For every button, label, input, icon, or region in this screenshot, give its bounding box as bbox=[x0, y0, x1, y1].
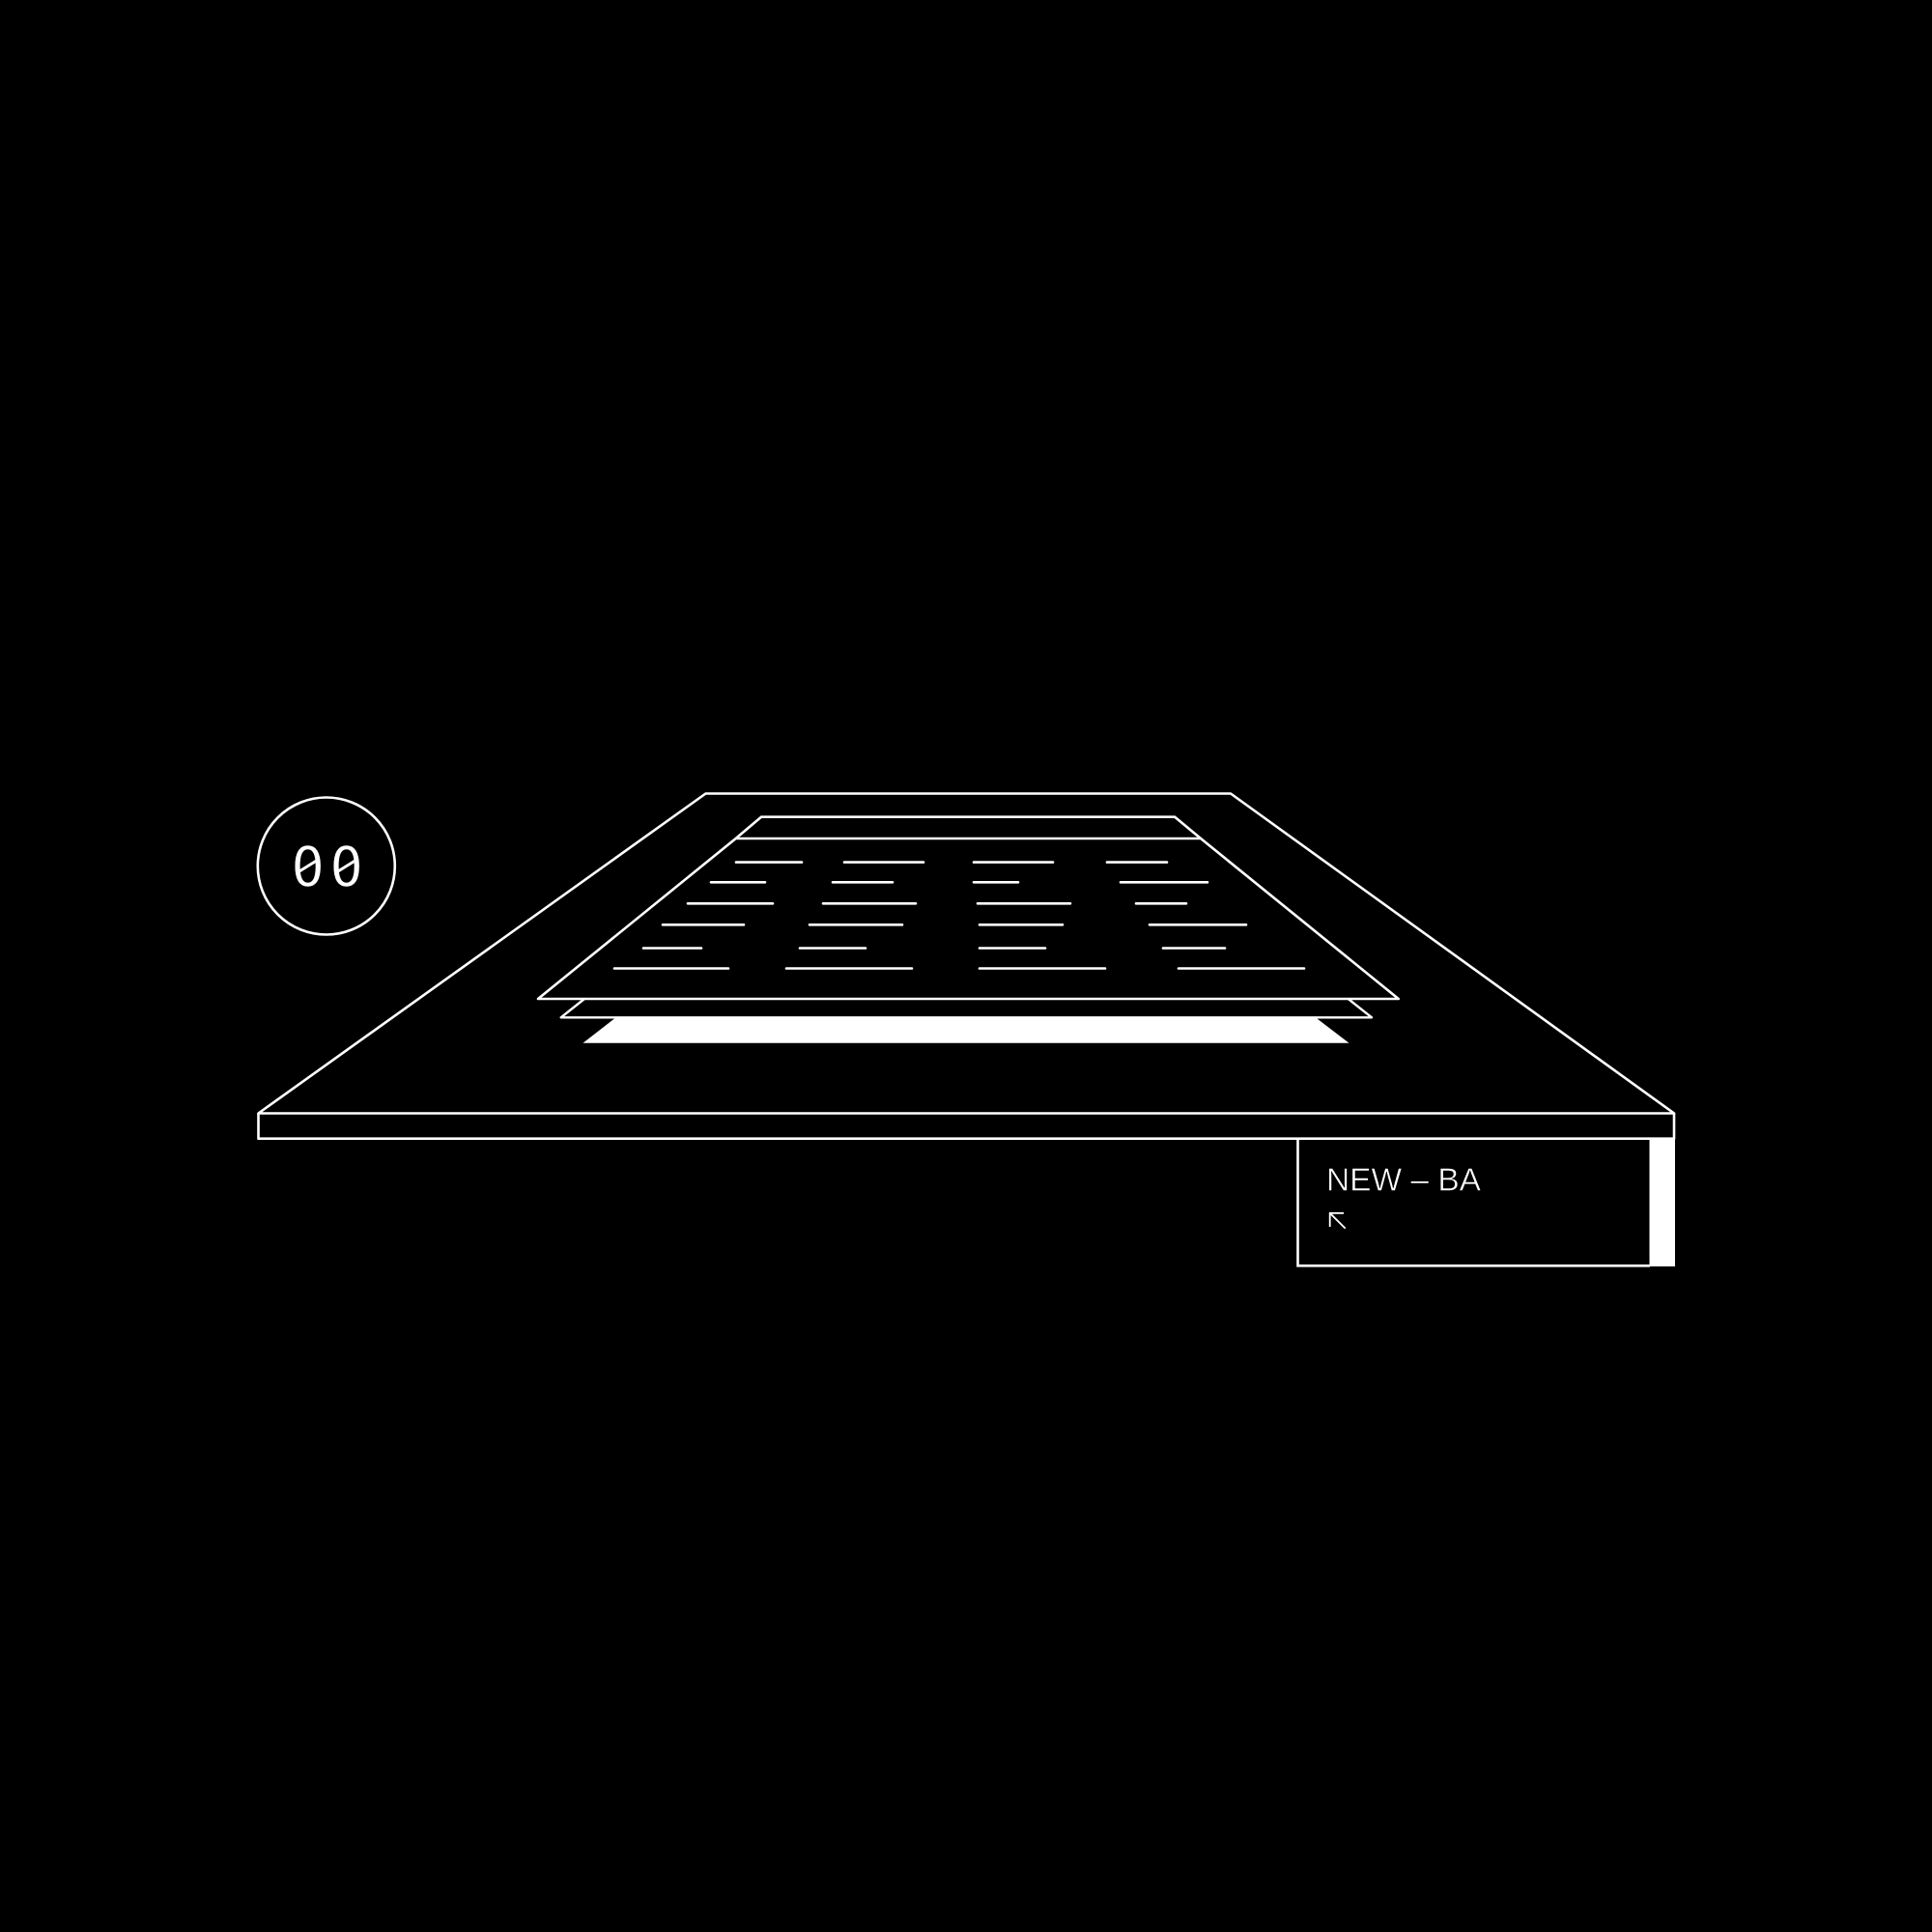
table top and front edge bbox=[259, 794, 1674, 1139]
bottom sheet: solid white bbox=[583, 1017, 1349, 1043]
badge: number 00 in circle bbox=[258, 798, 395, 935]
label text: NEW – BA bbox=[1326, 1163, 1482, 1199]
top sheet outline bbox=[538, 817, 1399, 999]
middle sheet outline bbox=[561, 999, 1372, 1017]
label box: NEW – BA bbox=[1298, 1139, 1675, 1266]
text lines on top sheet bbox=[614, 863, 1304, 968]
icon: up-left arrow bbox=[1330, 1213, 1346, 1229]
badge number text: 00 bbox=[292, 836, 363, 899]
zero slashes bbox=[298, 860, 357, 873]
